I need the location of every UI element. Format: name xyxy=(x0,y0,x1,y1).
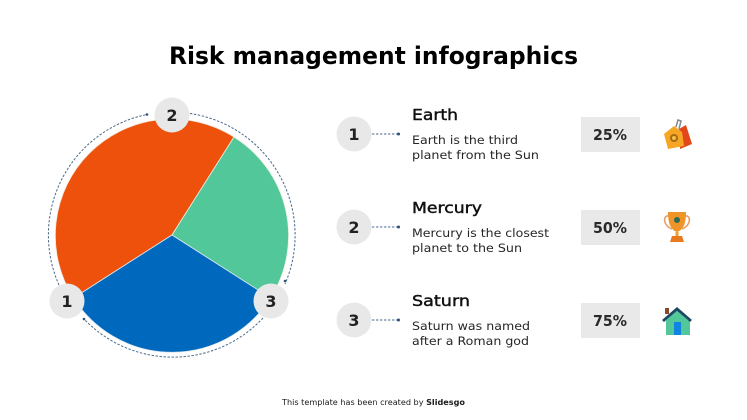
pie slice: orange xyxy=(55,119,234,298)
icon: trophy xyxy=(665,212,689,242)
number badge xyxy=(336,210,372,244)
description: Earth is the third xyxy=(412,133,518,147)
number badge xyxy=(336,116,372,152)
heading: Saturn xyxy=(412,292,470,310)
number badge: 2 xyxy=(348,218,360,237)
number badge: 3 xyxy=(348,311,360,330)
percent box xyxy=(581,117,640,152)
badge 1 xyxy=(50,284,84,318)
badge 3 xyxy=(254,284,288,318)
dashed orbit arcs xyxy=(48,113,295,357)
row: Saturn xyxy=(336,292,692,348)
connector arrow xyxy=(372,226,400,228)
row: Earth xyxy=(336,106,692,162)
badge 3: 3 xyxy=(265,292,277,311)
footer credit: This template has been created by Slidesgo xyxy=(281,398,465,407)
badge 1: 1 xyxy=(61,292,73,311)
percent box: 25% xyxy=(593,126,627,144)
percent box: 75% xyxy=(593,312,627,330)
description: after a Roman god xyxy=(412,334,529,348)
heading: Mercury xyxy=(412,199,482,217)
title: Risk management infographics xyxy=(169,42,578,70)
badge 2 xyxy=(154,98,190,132)
description: Saturn was named xyxy=(412,319,530,333)
connector arrow xyxy=(372,318,400,322)
description: planet to the Sun xyxy=(412,241,522,255)
percent box xyxy=(581,210,640,245)
pie slice: blue xyxy=(74,235,270,352)
number badge: 1 xyxy=(348,125,360,144)
connector arrow xyxy=(372,132,400,136)
row: Mercury xyxy=(336,199,689,255)
percent box: 50% xyxy=(593,219,627,237)
icon: price tags xyxy=(664,120,692,149)
icon: house xyxy=(662,307,692,335)
description: planet from the Sun xyxy=(412,148,539,162)
pie slice: green xyxy=(172,137,289,298)
chart: pie with numbered badges xyxy=(48,98,295,357)
description: Mercury is the closest xyxy=(412,226,550,240)
percent box xyxy=(581,303,640,338)
heading: Earth xyxy=(412,106,458,124)
number badge xyxy=(336,302,372,338)
badge 2: 2 xyxy=(166,106,178,125)
